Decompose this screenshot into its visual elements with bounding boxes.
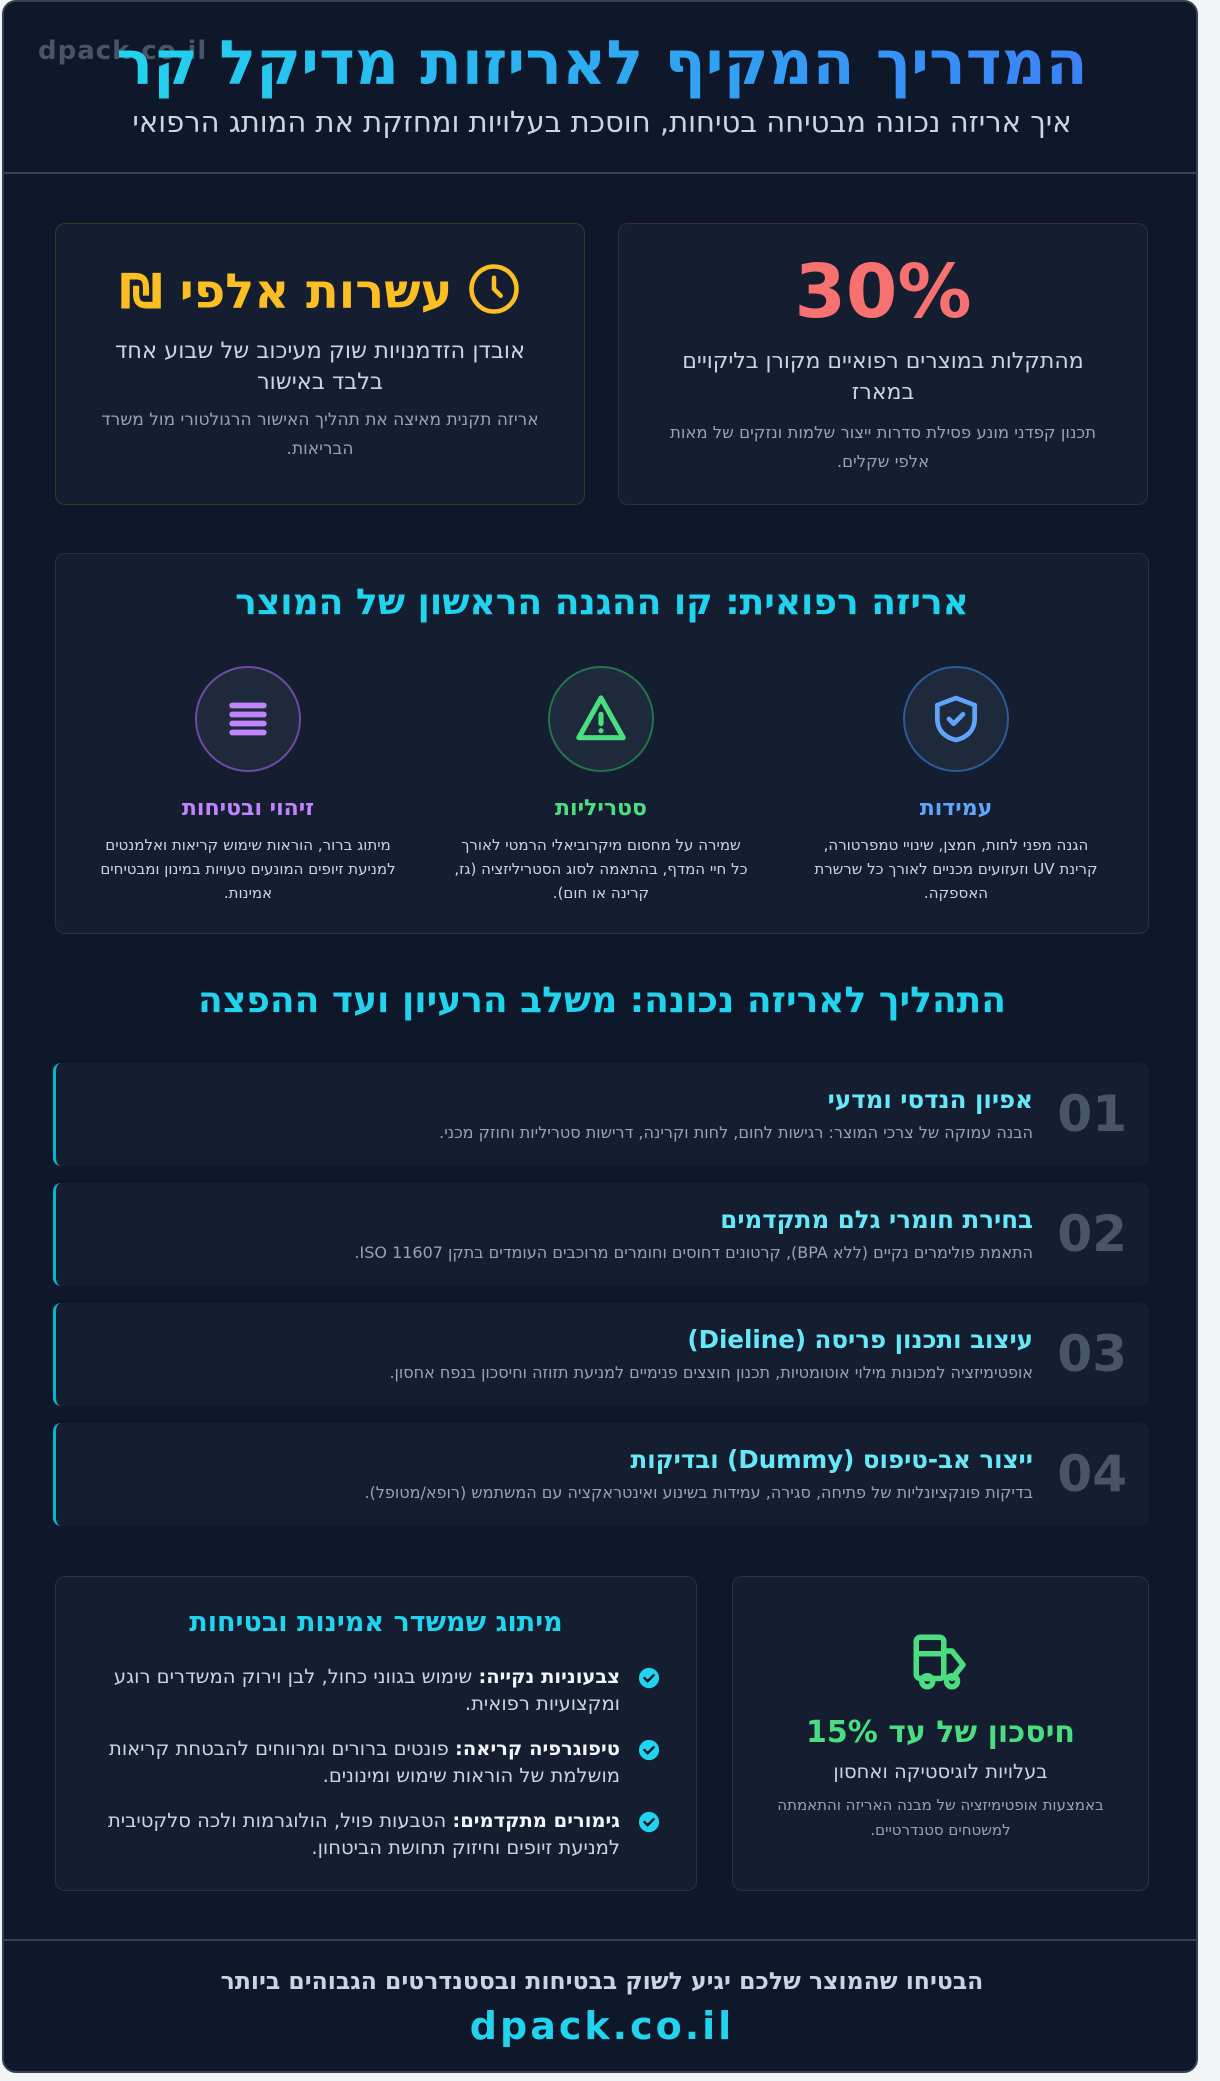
icon: shield xyxy=(903,666,1009,772)
item: typography: טיפוגרפיה קריאה: פונטים ברורים ומרווחים להבטחת קריאות מושלמת של הוראות שימוש ומינונים. xyxy=(109,1737,620,1787)
step 03: אופטימיזציה למכונות מילוי אוטומטיות, תכנון חוצצים פנימיים למניעת תזוזה וחיסכון בנפח אחסון. xyxy=(389,1363,1033,1382)
panel: branding xyxy=(55,1576,697,1891)
watermark: dpack.co.il xyxy=(38,36,207,66)
step 01 xyxy=(53,1063,1149,1166)
step 03: 03 xyxy=(1057,1325,1127,1383)
step 01: הבנה עמוקה של צרכי המוצר: רגישות לחום, לחות וקרינה, דרישות סטריליות וחוזק מכני. xyxy=(439,1123,1033,1142)
savings heading: חיסכון של עד 15% xyxy=(806,1715,1075,1750)
step 03 xyxy=(53,1303,1149,1406)
panel heading: מיתוג שמשדר אמינות ובטיחות xyxy=(189,1607,563,1638)
subtitle: איך אריזה נכונה מבטיחה בטיחות, חוסכת בעלויות ומחזקת את המותג הרפואי xyxy=(132,105,1072,139)
savings text: בעלויות לוגיסטיקה ואחסון xyxy=(833,1760,1048,1783)
footer domain: dpack.co.il xyxy=(470,2004,734,2048)
step 03: עיצוב ותכנון פריסה (Dieline) xyxy=(687,1325,1033,1354)
feature: sterility: שמירה על מחסום מיקרוביאלי הרמטי לאורך כל חיי המדף, בהתאמה לסוג הסטריליזציה (גז, קרינה או חום). xyxy=(454,836,748,902)
step 04: 04 xyxy=(1057,1445,1127,1503)
step 02: התאמת פולימרים נקיים (ללא BPA), קרטונים דחוסים וחומרים מרוכבים העומדים בתקן ISO 11607. xyxy=(354,1243,1033,1262)
stat text: מהתקלות במוצרים רפואיים מקורן בליקויים במארז xyxy=(682,349,1084,405)
feature: sterility xyxy=(454,666,748,902)
panel: savings xyxy=(732,1576,1149,1891)
feature: durability xyxy=(814,666,1098,902)
step 02: 02 xyxy=(1057,1205,1127,1263)
feature: identification: מיתוג ברור, הוראות שימוש קריאות ואלמנטים למניעת זיופים המונעים טעויות במינון ומבטיחים אמינות. xyxy=(100,836,396,902)
feature: identification xyxy=(100,666,396,902)
icon: warning xyxy=(548,666,654,772)
stat note: תכנון קפדני מונע פסילת סדרות ייצור שלמות ונזקים של מאות אלפי שקלים. xyxy=(670,423,1096,471)
stat number: 30% xyxy=(794,249,972,335)
item: finishes: גימורים מתקדמים: הטבעות פויל, הולוגרמות ולכה סלקטיבית למניעת זיופים וחיזוק תחושת הביטחון. xyxy=(108,1809,620,1859)
item: colors: צבעוניות נקייה: שימוש בגווני כחול, לבן וירוק המשדרים רוגע ומקצועיות רפואית. xyxy=(114,1665,620,1715)
savings note: באמצעות אופטימיזציה של מבנה האריזה והתאמתה למשטחים סטנדרטיים. xyxy=(777,1796,1104,1839)
icon: lines xyxy=(195,666,301,772)
process heading: התהליך לאריזה נכונה: משלב הרעיון ועד ההפצה xyxy=(198,980,1006,1021)
feature: durability: הגנה מפני לחות, חמצן, שינויי טמפרטורה, קרינת UV וזעזועים מכניים לאורך כל שרשרת האספקה. xyxy=(814,836,1098,902)
stat note: אריזה תקנית מאיצה את תהליך האישור הרגולטורי מול משרד הבריאות. xyxy=(101,410,539,459)
feature: identification: זיהוי ובטיחות xyxy=(182,796,314,821)
feature: sterility: סטריליות xyxy=(555,796,647,821)
footer text: הבטיחו שהמוצר שלכם יגיע לשוק בבטיחות ובסטנדרטים הגבוהים ביותר xyxy=(221,1967,983,1995)
step 02 xyxy=(53,1183,1149,1286)
step 01: 01 xyxy=(1057,1085,1127,1143)
step 01: אפיון הנדסי ומדעי xyxy=(828,1085,1033,1114)
panel: protection xyxy=(55,553,1149,934)
stat heading with clock icon: עשרות אלפי ₪ xyxy=(119,264,453,320)
step 04 xyxy=(53,1423,1149,1526)
icon: truck xyxy=(914,1634,966,1690)
stat card: 30% xyxy=(618,223,1148,505)
step 04: ייצור אב-טיפוס (Dummy) ובדיקות xyxy=(630,1445,1033,1474)
stat card: thousands xyxy=(55,223,585,505)
feature: durability: עמידות xyxy=(920,796,992,821)
panel heading: אריזה רפואית: קו ההגנה הראשון של המוצר xyxy=(235,582,969,623)
step 04: בדיקות פונקציונליות של פתיחה, סגירה, עמידות בשינוע ואינטראקציה עם המשתמש (רופא/מטופל). xyxy=(364,1483,1033,1502)
step 02: בחירת חומרי גלם מתקדמים xyxy=(720,1205,1033,1234)
stat text: אובדן הזדמנויות שוק מעיכוב של שבוע אחד בלבד באישור xyxy=(115,338,525,395)
title: המדריך המקיף לאריזות מדיקל קר xyxy=(116,28,1088,99)
